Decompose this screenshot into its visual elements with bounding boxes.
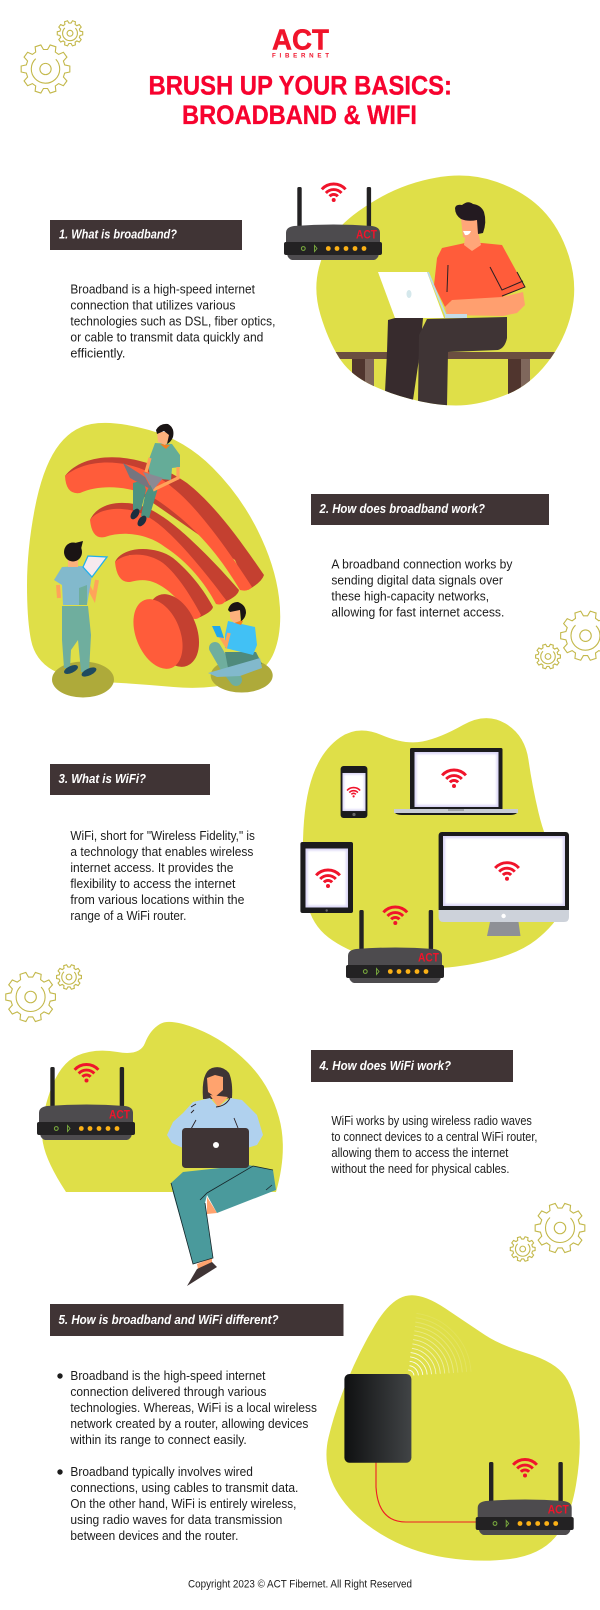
icon: gears top left — [21, 21, 83, 93]
blob: section 2 — [27, 423, 280, 688]
text block 5: bullet list — [57, 1369, 317, 1543]
heading bar 1: 1. What is broadband? — [59, 226, 177, 242]
text block 2 — [331, 557, 513, 619]
text block 1 — [70, 283, 275, 361]
3D wifi symbol — [65, 457, 264, 676]
text block 3: a technology that enables wireless — [70, 845, 253, 859]
bullet 2: connections, using cables to transmit data. — [70, 1481, 298, 1495]
device: desktop monitor — [439, 832, 569, 936]
title: BROADBAND & WIFI — [182, 100, 417, 130]
text block 4: without the need for physical cables. — [331, 1162, 509, 1176]
panel: section 3 illustration — [300, 718, 569, 968]
black device box — [344, 1374, 411, 1463]
ground ellipses — [52, 658, 273, 698]
router: section 1 — [284, 187, 382, 260]
panel: section 5 illustration — [326, 1295, 580, 1561]
title: BRUSH UP YOUR BASICS: — [148, 70, 452, 100]
device: tablet — [300, 842, 353, 913]
bullet 2: using radio waves for data transmission — [70, 1513, 282, 1527]
logo: ACT Fibernet: ACT — [272, 24, 329, 56]
logo: ACT Fibernet: FIBERNET — [272, 52, 329, 60]
heading bar 2: 2. How does broadband work? — [319, 501, 485, 516]
panel: section 4 illustration — [42, 1022, 283, 1286]
person with laptop — [378, 202, 525, 406]
heading bar 5 — [50, 1304, 344, 1336]
icon: wifi signal section 3 — [383, 907, 407, 925]
icon: gears section 4 — [510, 1203, 585, 1261]
text block 1: Broadband is a high-speed internet — [70, 283, 255, 297]
text block 2: sending digital data signals over — [331, 573, 503, 587]
blob: section 3 — [303, 718, 567, 968]
router: section 4: ACT — [109, 1108, 131, 1122]
bullet 2: Broadband typically involves wired — [70, 1465, 253, 1479]
heading bar 4: 4. How does WiFi work? — [319, 1058, 451, 1073]
bullet 2 — [57, 1465, 298, 1543]
bullet 1: network created by a router, allowing devices — [70, 1417, 308, 1431]
text block 4: to connect devices to a central WiFi router, — [331, 1130, 537, 1144]
text block 4 — [331, 1114, 537, 1176]
icon: wifi signal section 5 — [513, 1459, 537, 1478]
panel: section 2 illustration — [27, 423, 280, 698]
icon: gears section 2 — [536, 611, 600, 669]
text block 2: A broadband connection works by — [331, 557, 513, 571]
router: section 5: ACT — [548, 1502, 569, 1516]
signal waves — [337, 1305, 479, 1447]
text block 3: from various locations within the — [70, 893, 244, 907]
text block 1: connection that utilizes various — [70, 299, 235, 313]
router: section 5 — [476, 1462, 574, 1535]
text block 3: range of a WiFi router. — [70, 909, 186, 923]
bullet 1: technologies. Whereas, WiFi is a local wireless — [70, 1401, 317, 1415]
heading bar 4 — [311, 1050, 513, 1082]
device: phone — [341, 766, 367, 818]
woman with laptop — [167, 1067, 276, 1286]
heading bar 3 — [50, 764, 210, 795]
router: section 1: ACT — [356, 228, 378, 242]
text block 1: or cable to transmit data quickly and — [70, 331, 263, 345]
bullet 1: within its range to connect easily. — [69, 1433, 247, 1447]
heading bar 1 — [50, 220, 242, 250]
blob: section 4 — [42, 1022, 283, 1192]
text block 3: internet access. It provides the — [70, 861, 233, 875]
text block 2: allowing for fast internet access. — [331, 605, 504, 619]
bullet 1 — [57, 1369, 317, 1447]
person on wifi with laptop — [123, 424, 180, 528]
text block 3 — [70, 829, 255, 923]
router: section 3 — [346, 910, 444, 983]
person standing with tablet — [54, 541, 107, 679]
heading bar 2 — [311, 494, 549, 525]
router: section 3: ACT — [418, 950, 440, 964]
icon: gears section 3 — [6, 965, 81, 1022]
bullet 2: On the other hand, WiFi is entirely wireless, — [70, 1497, 296, 1511]
router: section 4 — [37, 1067, 135, 1140]
bullet 1: connection delivered through various — [70, 1385, 266, 1399]
blob: section 1 — [316, 176, 574, 406]
text block 3: flexibility to access the internet — [70, 877, 236, 891]
title — [148, 70, 452, 130]
text block 4: allowing them to access the internet — [331, 1146, 509, 1160]
text block 3: WiFi, short for "Wireless Fidelity," is — [70, 829, 255, 843]
text block 1: technologies such as DSL, fiber optics, — [70, 315, 275, 329]
text block 4: WiFi works by using wireless radio waves — [331, 1114, 532, 1128]
person sitting with phone — [208, 602, 262, 680]
panel: section 1 illustration — [316, 176, 574, 406]
device: laptop — [394, 748, 518, 815]
bench — [336, 352, 555, 394]
text block 1: efficiently. — [70, 347, 125, 361]
heading bar 3: 3. What is WiFi? — [58, 771, 146, 786]
text block 2: these high-capacity networks, — [331, 589, 489, 603]
heading bar 5: 5. How is broadband and WiFi different? — [58, 1312, 279, 1327]
red cable — [376, 1462, 476, 1522]
icon: wifi signal section 4 — [75, 1064, 98, 1082]
blob: section 5 — [326, 1295, 580, 1561]
bullet 2: between devices and the router. — [70, 1529, 238, 1543]
bullet 1: Broadband is the high-speed internet — [70, 1369, 266, 1383]
copyright footer: Copyright 2023 © ACT Fibernet. All Right Reserved — [188, 1579, 412, 1591]
icon: wifi signal section 1 — [322, 184, 346, 202]
